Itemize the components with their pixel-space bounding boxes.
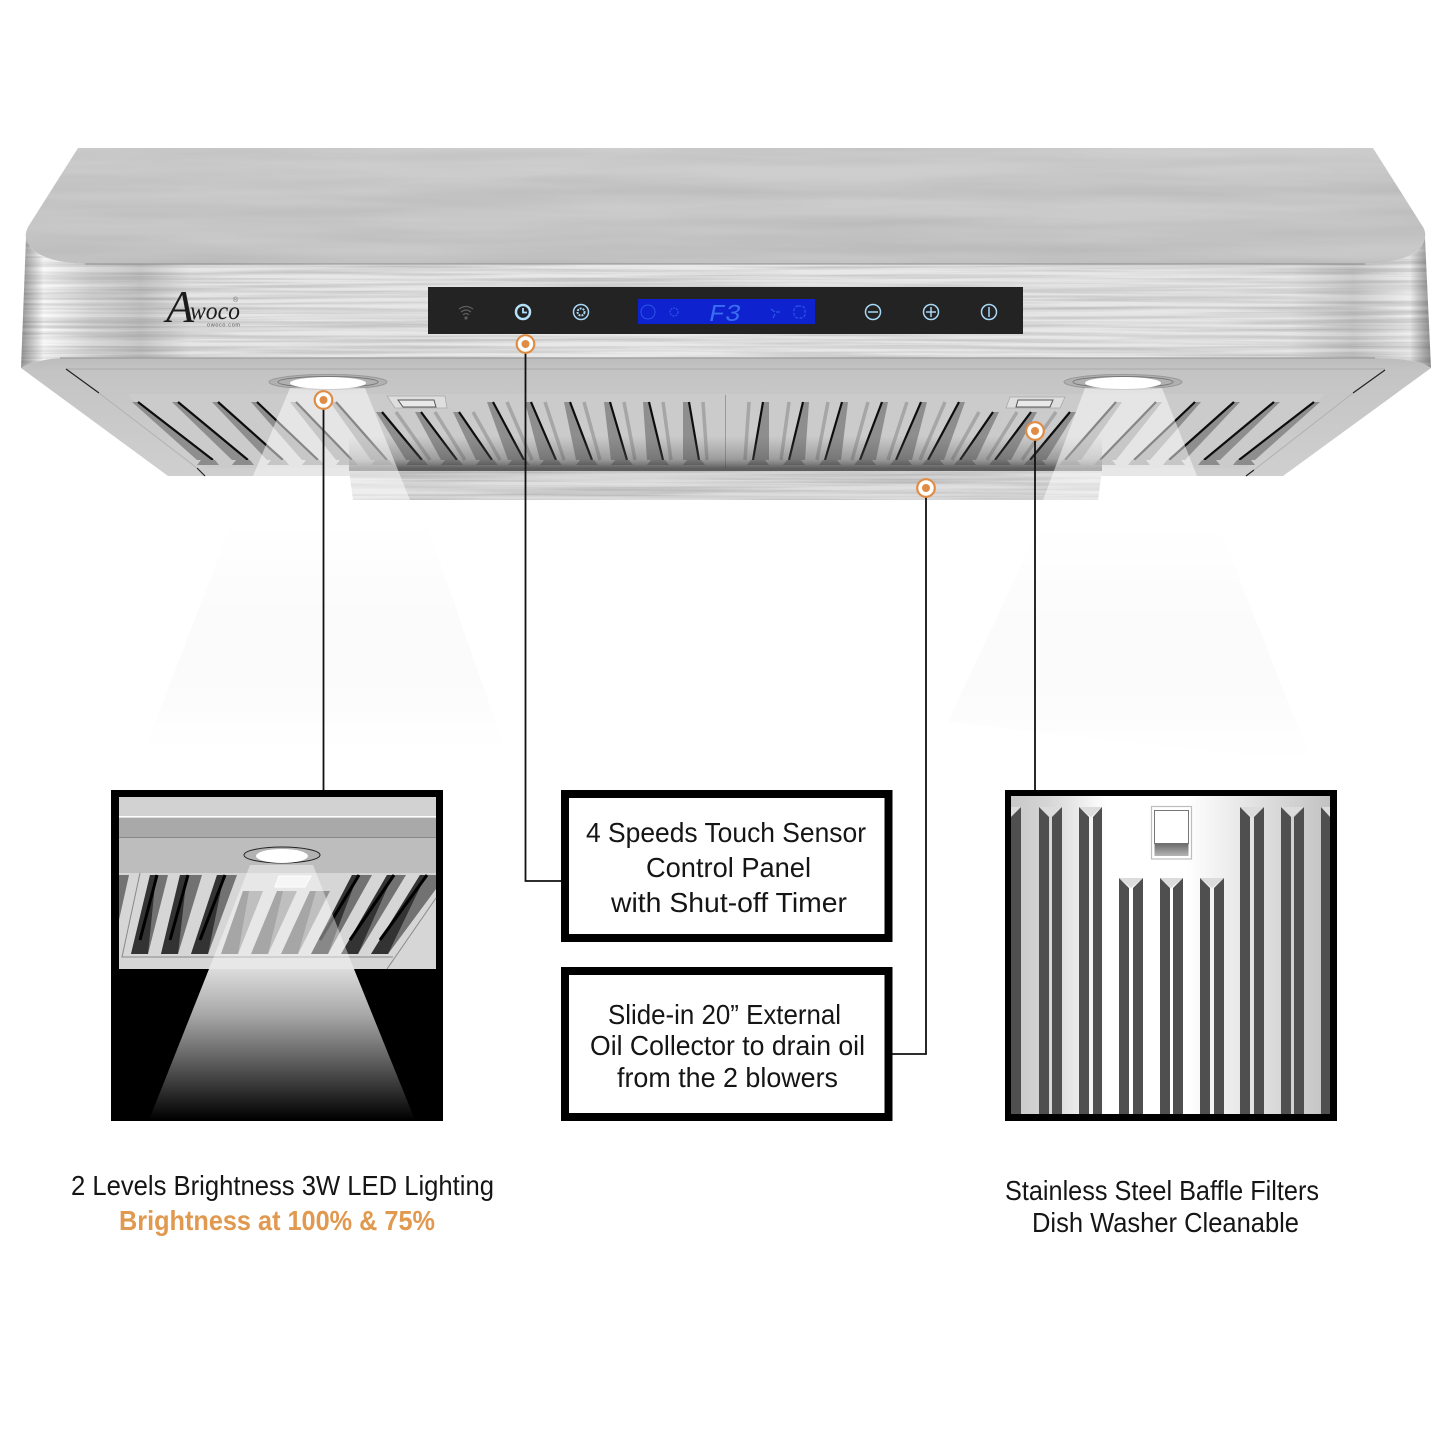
logo: Awoco <box>163 281 240 332</box>
leader line: control panel <box>526 350 561 881</box>
leader line: oil collector <box>892 494 926 1054</box>
marker: control panel <box>517 335 534 353</box>
filter latch <box>1152 806 1192 859</box>
caption: baffle filters <box>1005 1175 1319 1238</box>
light beam in lighting photo <box>149 865 415 1120</box>
LCD display: F3 <box>709 302 741 329</box>
baffle slots: left half <box>132 402 707 465</box>
text: control panel description: 4 Speeds Touch Sensor <box>586 817 866 848</box>
marker: lighting <box>315 391 332 409</box>
leader line: lighting <box>322 405 324 790</box>
text: oil collector description <box>590 999 865 1093</box>
caption: lighting <box>71 1170 494 1236</box>
panel: oil collector callout <box>565 971 888 1117</box>
hood top surface <box>20 148 1430 266</box>
touch control panel <box>428 287 1023 334</box>
text: oil collector description: Oil Collector to drain oil <box>590 1030 865 1061</box>
text: oil collector description: from the 2 blowers <box>617 1062 838 1093</box>
text: control panel description: with Shut-off Timer <box>610 887 847 918</box>
leader line: baffle filters <box>1034 436 1036 790</box>
icon: plus <box>924 304 938 320</box>
faint light beam: right <box>948 525 1312 762</box>
shadow above oil collector <box>349 436 1102 469</box>
caption: lighting: 2 Levels Brightness 3W LED Lighting <box>71 1170 494 1201</box>
logo: Awoco: ® <box>233 296 239 304</box>
icon: power <box>982 304 996 320</box>
text: oil collector description: Slide-in 20” External <box>608 999 841 1030</box>
marker: oil collector <box>917 479 935 497</box>
icon: minus <box>866 304 880 320</box>
caption: lighting: Brightness at 100% & 75% <box>119 1205 435 1236</box>
vent clip: right <box>1006 397 1065 408</box>
logo: Awoco: A <box>163 281 195 332</box>
range hood product illustration <box>20 148 1432 502</box>
dark filter bars <box>1011 807 1330 1114</box>
logo: Awoco: woco <box>190 298 240 325</box>
hood underside <box>21 358 1431 476</box>
text: control panel description <box>586 817 866 918</box>
LED lamp: right <box>1064 374 1182 390</box>
panel: LED lighting photo <box>111 790 443 1121</box>
LED lamp: left <box>269 374 387 390</box>
hood front band <box>20 236 1432 370</box>
caption: baffle filters: Dish Washer Cleanable <box>1032 1207 1299 1238</box>
external oil collector <box>345 468 1105 502</box>
light cone on hood: right <box>1043 388 1197 500</box>
panel: baffle filter photo <box>1005 790 1337 1121</box>
lamp in lighting photo <box>244 847 320 863</box>
vent clip: left <box>387 396 447 408</box>
caption: baffle filters: Stainless Steel Baffle Filters <box>1005 1175 1319 1206</box>
icon: light <box>574 304 588 320</box>
baffle slots: right half <box>745 402 1320 465</box>
icon: wifi <box>459 306 473 319</box>
panel: control panel callout <box>565 794 888 938</box>
text: control panel description: Control Panel <box>646 852 811 883</box>
vent in lighting photo <box>275 876 311 887</box>
icon: timer clock <box>516 305 530 319</box>
light cone on hood: left <box>253 388 410 500</box>
logo: Awoco: owoco.com <box>207 322 240 328</box>
faint light beam: left <box>146 522 506 752</box>
slots in lighting photo <box>119 873 436 969</box>
LCD display <box>638 299 815 329</box>
marker: baffle filters <box>1026 422 1044 440</box>
chevrons on filter bars <box>1011 807 1330 888</box>
